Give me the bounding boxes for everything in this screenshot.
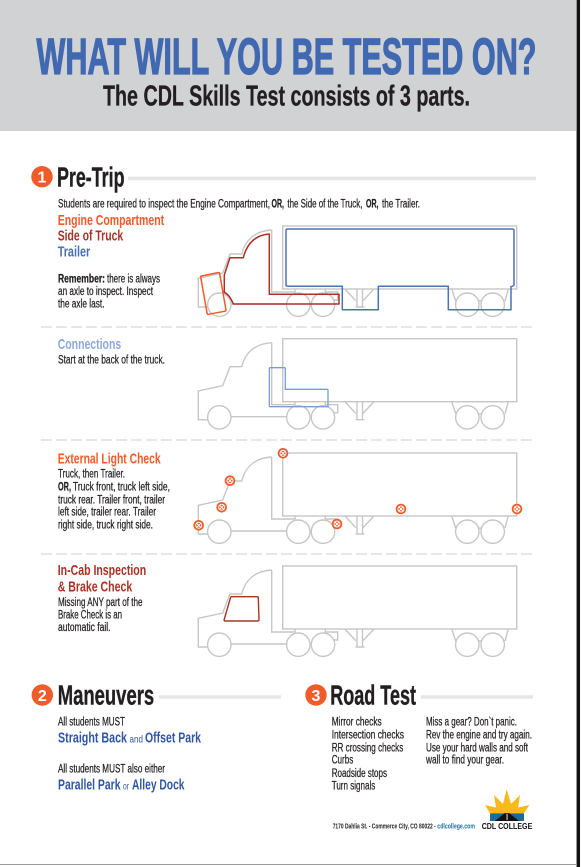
section heading: Maneuvers [32,679,281,710]
truck diagram: external lights [193,448,522,543]
text block: in-cab inspection: Missing ANY part of the [58,597,142,609]
text block: in-cab inspection: Brake Check is an [58,609,122,621]
list: road test checks: Roadside stops [332,768,387,780]
logo: CDL College [482,789,533,831]
text block: in-cab inspection: & Brake Check [58,579,133,596]
text block: in-cab inspection [58,562,146,634]
section heading: Maneuvers: 2 [38,688,47,705]
section heading: Road Test: 3 [312,688,321,705]
footer address: cdlcollege.com [437,822,475,831]
text block: external light check: Truck, then Trailer. [58,468,125,480]
text block: maneuvers: Parallel Park [58,777,121,793]
Pre-Trip intro text: the Side of the Truck, [287,198,362,210]
text block: external light check: Truck front, truck left side, [73,482,170,494]
text block: external light check: right side, truck right side. [58,519,153,531]
text block: remember [58,273,160,310]
text block: external light check: truck rear. Trailer front, trailer [58,494,165,506]
text block: external light check: OR, [58,482,71,494]
text block: connections [58,336,165,366]
text block: external light check: External Light Check [58,450,161,467]
list: road test checks: RR crossing checks [332,743,403,755]
text block: in-cab inspection: In-Cab Inspection [58,562,146,579]
text block: road test advice: Rev the engine and try again. [426,730,532,742]
section heading: Pre-Trip [31,162,536,193]
truck diagram: engine, side, trailer [198,226,517,316]
text block: connections: Connections [58,336,121,353]
text block: maneuvers: All students MUST also either [58,763,165,775]
text block: maneuvers [58,717,202,793]
list: road test checks: Intersection checks [332,730,404,742]
text block: maneuvers: Alley Dock [132,777,185,793]
truck diagram: in-cab [198,566,517,656]
list: road test checks: Curbs [332,755,353,767]
section heading: Pre-Trip: 1 [38,170,47,186]
list: road test checks [332,717,404,793]
section heading: Road Test: Road Test [330,679,416,710]
truck diagram: connections [198,339,517,429]
Pre-Trip intro text: OR, [366,198,378,210]
text block: road test advice: Miss a gear? Don`t panic. [426,717,517,729]
text block: in-cab inspection: automatic fail. [58,622,110,634]
text block: maneuvers: and [130,733,143,745]
labels: inspection areas: Trailer [58,244,90,261]
footer address: 7170 Dahlia St. - Commerce City, CO 80022 - [333,822,436,831]
list: road test checks: Mirror checks [332,717,382,729]
labels: inspection areas [58,212,164,261]
Pre-Trip intro text: OR, [272,198,284,210]
section heading: Pre-Trip: Pre-Trip [57,162,124,193]
Pre-Trip intro text: Students are required to inspect the Engine Compartment, [58,198,270,210]
text block: road test advice: wall to find your gear. [425,755,504,767]
labels: inspection areas: Engine Compartment [58,212,164,229]
Pre-Trip intro text: the Trailer. [382,198,420,210]
text block: remember: an axle to inspect. Inspect [58,286,154,298]
text block: maneuvers: Straight Back [58,730,128,746]
text block: external light check [58,450,170,531]
text block: maneuvers: Offset Park [145,730,202,746]
text block: road test advice [425,717,532,767]
header band [0,0,577,131]
labels: inspection areas: Side of Truck [58,228,124,244]
text block: maneuvers: or [123,780,129,792]
text block: maneuvers: All students MUST [58,717,125,729]
text block: external light check: left side, trailer rear. Trailer [58,507,156,519]
text block: remember: Remember: [58,273,105,285]
section heading: Maneuvers: Maneuvers [58,679,154,710]
text block: connections: Start at the back of the truck. [58,354,165,366]
section heading: Road Test [305,679,533,710]
text block: road test advice: Use your hard walls and soft [426,743,529,755]
logo: CDL College: CDL COLLEGE [482,821,533,831]
list: road test checks: Turn signals [332,781,375,793]
text block: remember: the axle last. [58,298,104,310]
text block: remember: there is always [107,273,160,285]
